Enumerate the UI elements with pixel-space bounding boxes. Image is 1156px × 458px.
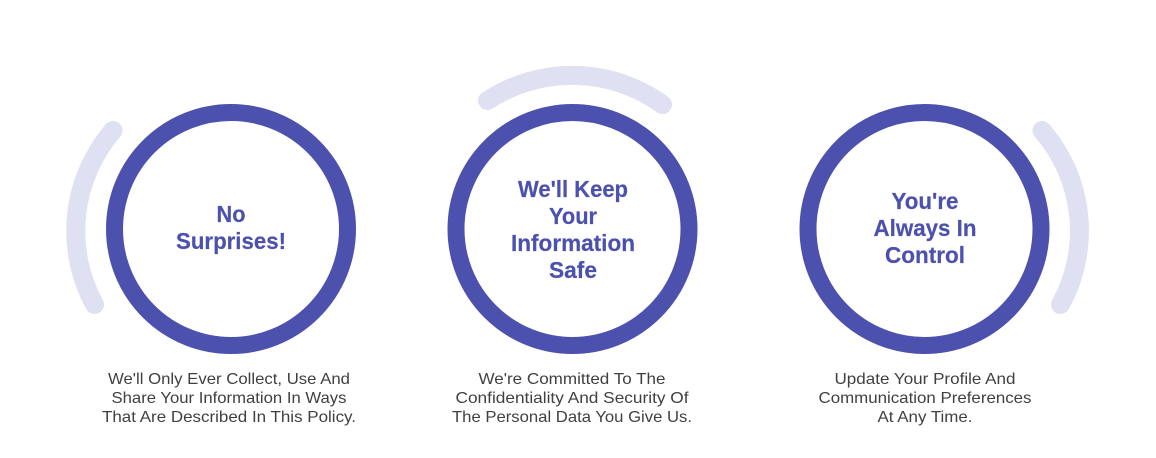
text: no surprises description: That Are Described In This Policy. — [102, 409, 356, 426]
ring: keep information safe — [456, 112, 689, 346]
text: always in control description: Update Your Profile And — [834, 371, 1016, 388]
decorative arc: right — [1042, 130, 1079, 304]
ring: always in control — [808, 112, 1041, 346]
text: no surprises description: We'll Only Ever Collect, Use And — [108, 371, 350, 388]
text: no surprises description: Share Your Information In Ways — [112, 390, 346, 407]
heading: keep information safe: Information — [511, 230, 635, 256]
text: keep information safe description: Confidentiality And Security Of — [456, 390, 689, 407]
heading: no surprises: No — [216, 201, 246, 227]
heading: keep information safe: Your — [549, 203, 597, 229]
heading: no surprises: Surprises! — [176, 228, 286, 254]
text: keep information safe description: We're Committed To The — [478, 371, 666, 388]
panel: no surprises — [76, 112, 356, 426]
decorative arc: left — [76, 130, 113, 304]
text: always in control description: Communication Preferences — [818, 390, 1032, 407]
heading: keep information safe: We'll Keep — [518, 176, 628, 202]
ring: no surprises — [114, 112, 348, 346]
heading: always in control: Control — [885, 242, 965, 268]
heading: always in control: You're — [892, 188, 958, 214]
panel: always in control — [808, 112, 1079, 426]
heading: always in control: Always In — [874, 215, 976, 241]
panel: keep information safe — [452, 75, 692, 426]
text: keep information safe description: The Personal Data You Give Us. — [452, 409, 692, 426]
decorative arc: top — [488, 75, 662, 104]
text: always in control description: At Any Time. — [878, 409, 972, 426]
heading: keep information safe: Safe — [549, 257, 597, 283]
